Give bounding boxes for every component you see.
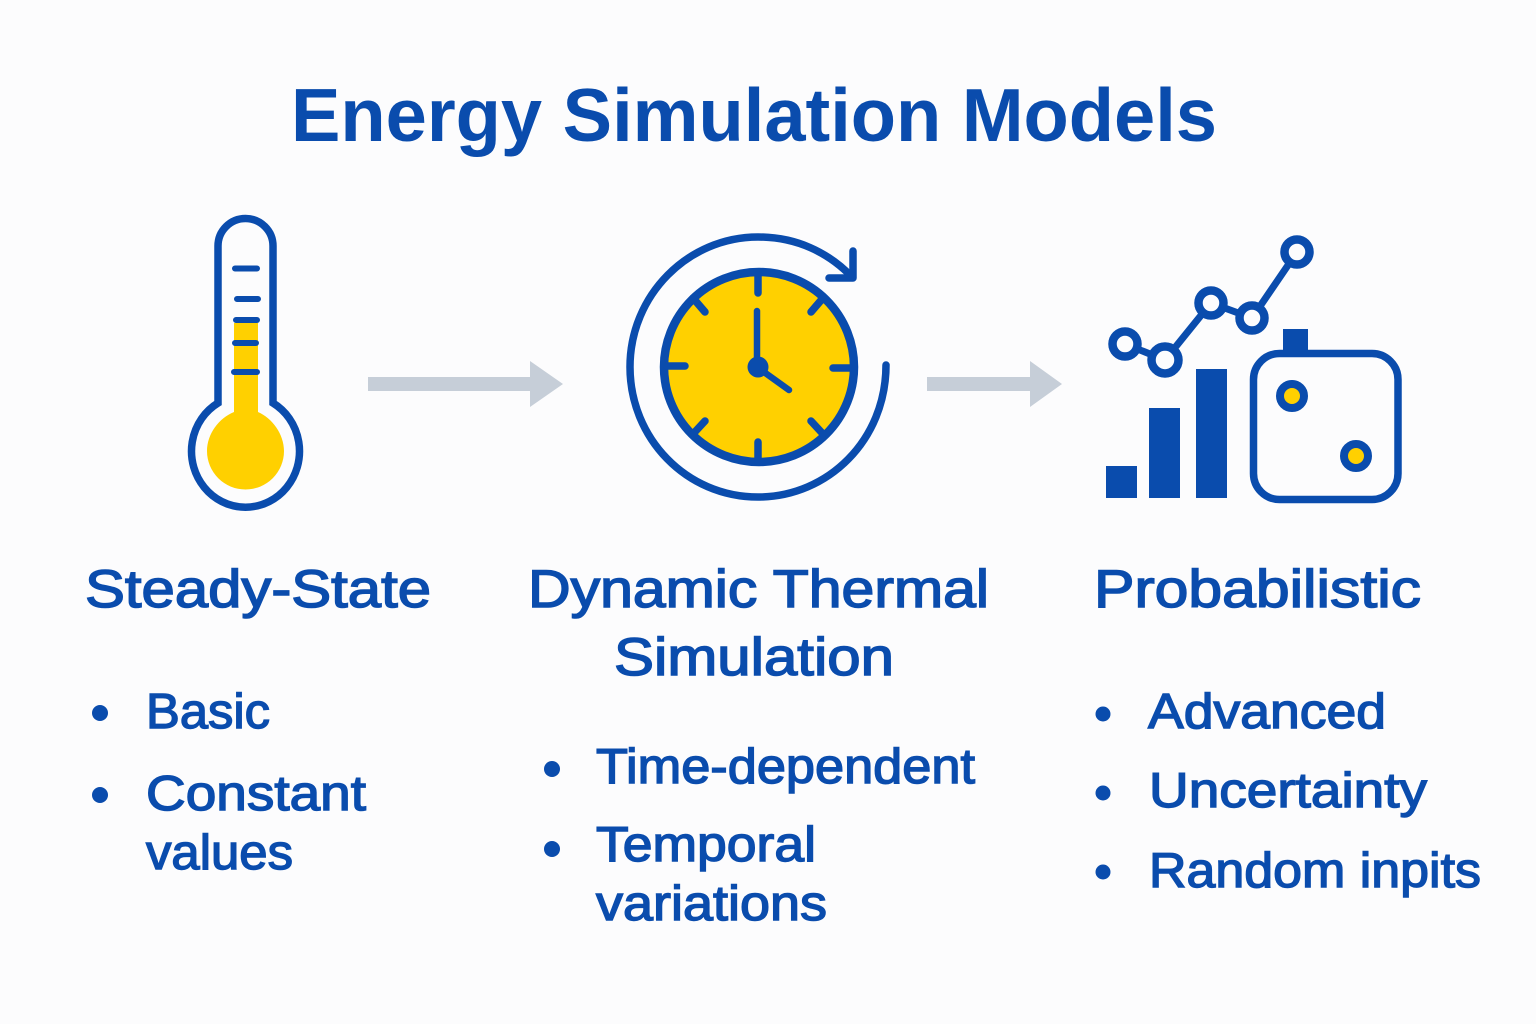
line chart [1112, 240, 1310, 374]
thermometer outline [191, 218, 300, 507]
heading: dynamic thermal simulation: Dynamic Thermal [528, 560, 989, 619]
list: dynamic thermal simulation [544, 740, 975, 931]
heading: dynamic thermal simulation [528, 560, 989, 687]
list: dynamic thermal simulation: Time-dependent [596, 740, 975, 794]
thermometer scale ticks [234, 268, 258, 372]
title: Energy Simulation Models [291, 73, 1217, 157]
clock hands [748, 311, 789, 390]
heading: steady-state: Steady-State [85, 560, 431, 619]
arrow: steady-state to dynamic [368, 361, 563, 407]
list: probabilistic: Advanced [1148, 685, 1386, 739]
icon: probabilistic chart and die [1106, 240, 1398, 500]
icon: clock with cycle arrow [630, 237, 886, 497]
list: steady-state [92, 685, 366, 880]
list: probabilistic [1096, 685, 1481, 898]
list: probabilistic: Uncertainty [1149, 764, 1428, 818]
circular arrow head [829, 251, 853, 278]
list: steady-state: values [146, 826, 293, 880]
die tab [1283, 329, 1308, 353]
clock tick marks [667, 275, 850, 461]
thermometer mercury [207, 323, 284, 490]
arrow: dynamic to probabilistic [927, 361, 1062, 407]
heading: probabilistic: Probabilistic [1094, 560, 1421, 619]
list: dynamic thermal simulation: Temporal [596, 818, 816, 872]
circular arrow [630, 237, 886, 497]
icon: thermometer [191, 218, 300, 507]
clock face [664, 272, 854, 462]
list: probabilistic: Random inpits [1149, 844, 1481, 898]
list: steady-state: Constant [146, 767, 366, 821]
bar chart [1106, 369, 1227, 498]
die pips [1280, 384, 1368, 468]
list: steady-state: Basic [146, 685, 270, 739]
heading: dynamic thermal simulation: Simulation [614, 628, 894, 687]
die body [1254, 354, 1398, 500]
list: dynamic thermal simulation: variations [596, 877, 827, 931]
